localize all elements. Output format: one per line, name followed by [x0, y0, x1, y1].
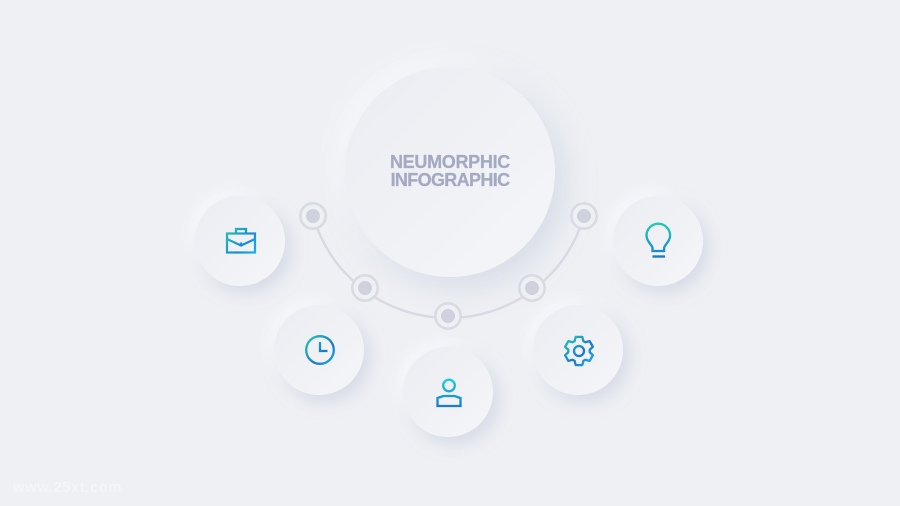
icon: gear [565, 337, 593, 365]
icon: clock [306, 336, 334, 364]
circle: light bulb [613, 196, 703, 286]
title: NEUMORPHIC [390, 152, 510, 172]
watermark: www.25xt.com [13, 479, 122, 496]
central circle [345, 67, 555, 277]
circle: gear [533, 305, 623, 395]
icon: light bulb [646, 224, 670, 256]
title [390, 152, 510, 190]
circle: briefcase [195, 196, 285, 286]
icon: person [438, 380, 460, 406]
circle: clock [274, 305, 364, 395]
circle: person [403, 347, 493, 437]
icon: briefcase [227, 229, 255, 252]
title: INFOGRAPHIC [391, 170, 509, 190]
